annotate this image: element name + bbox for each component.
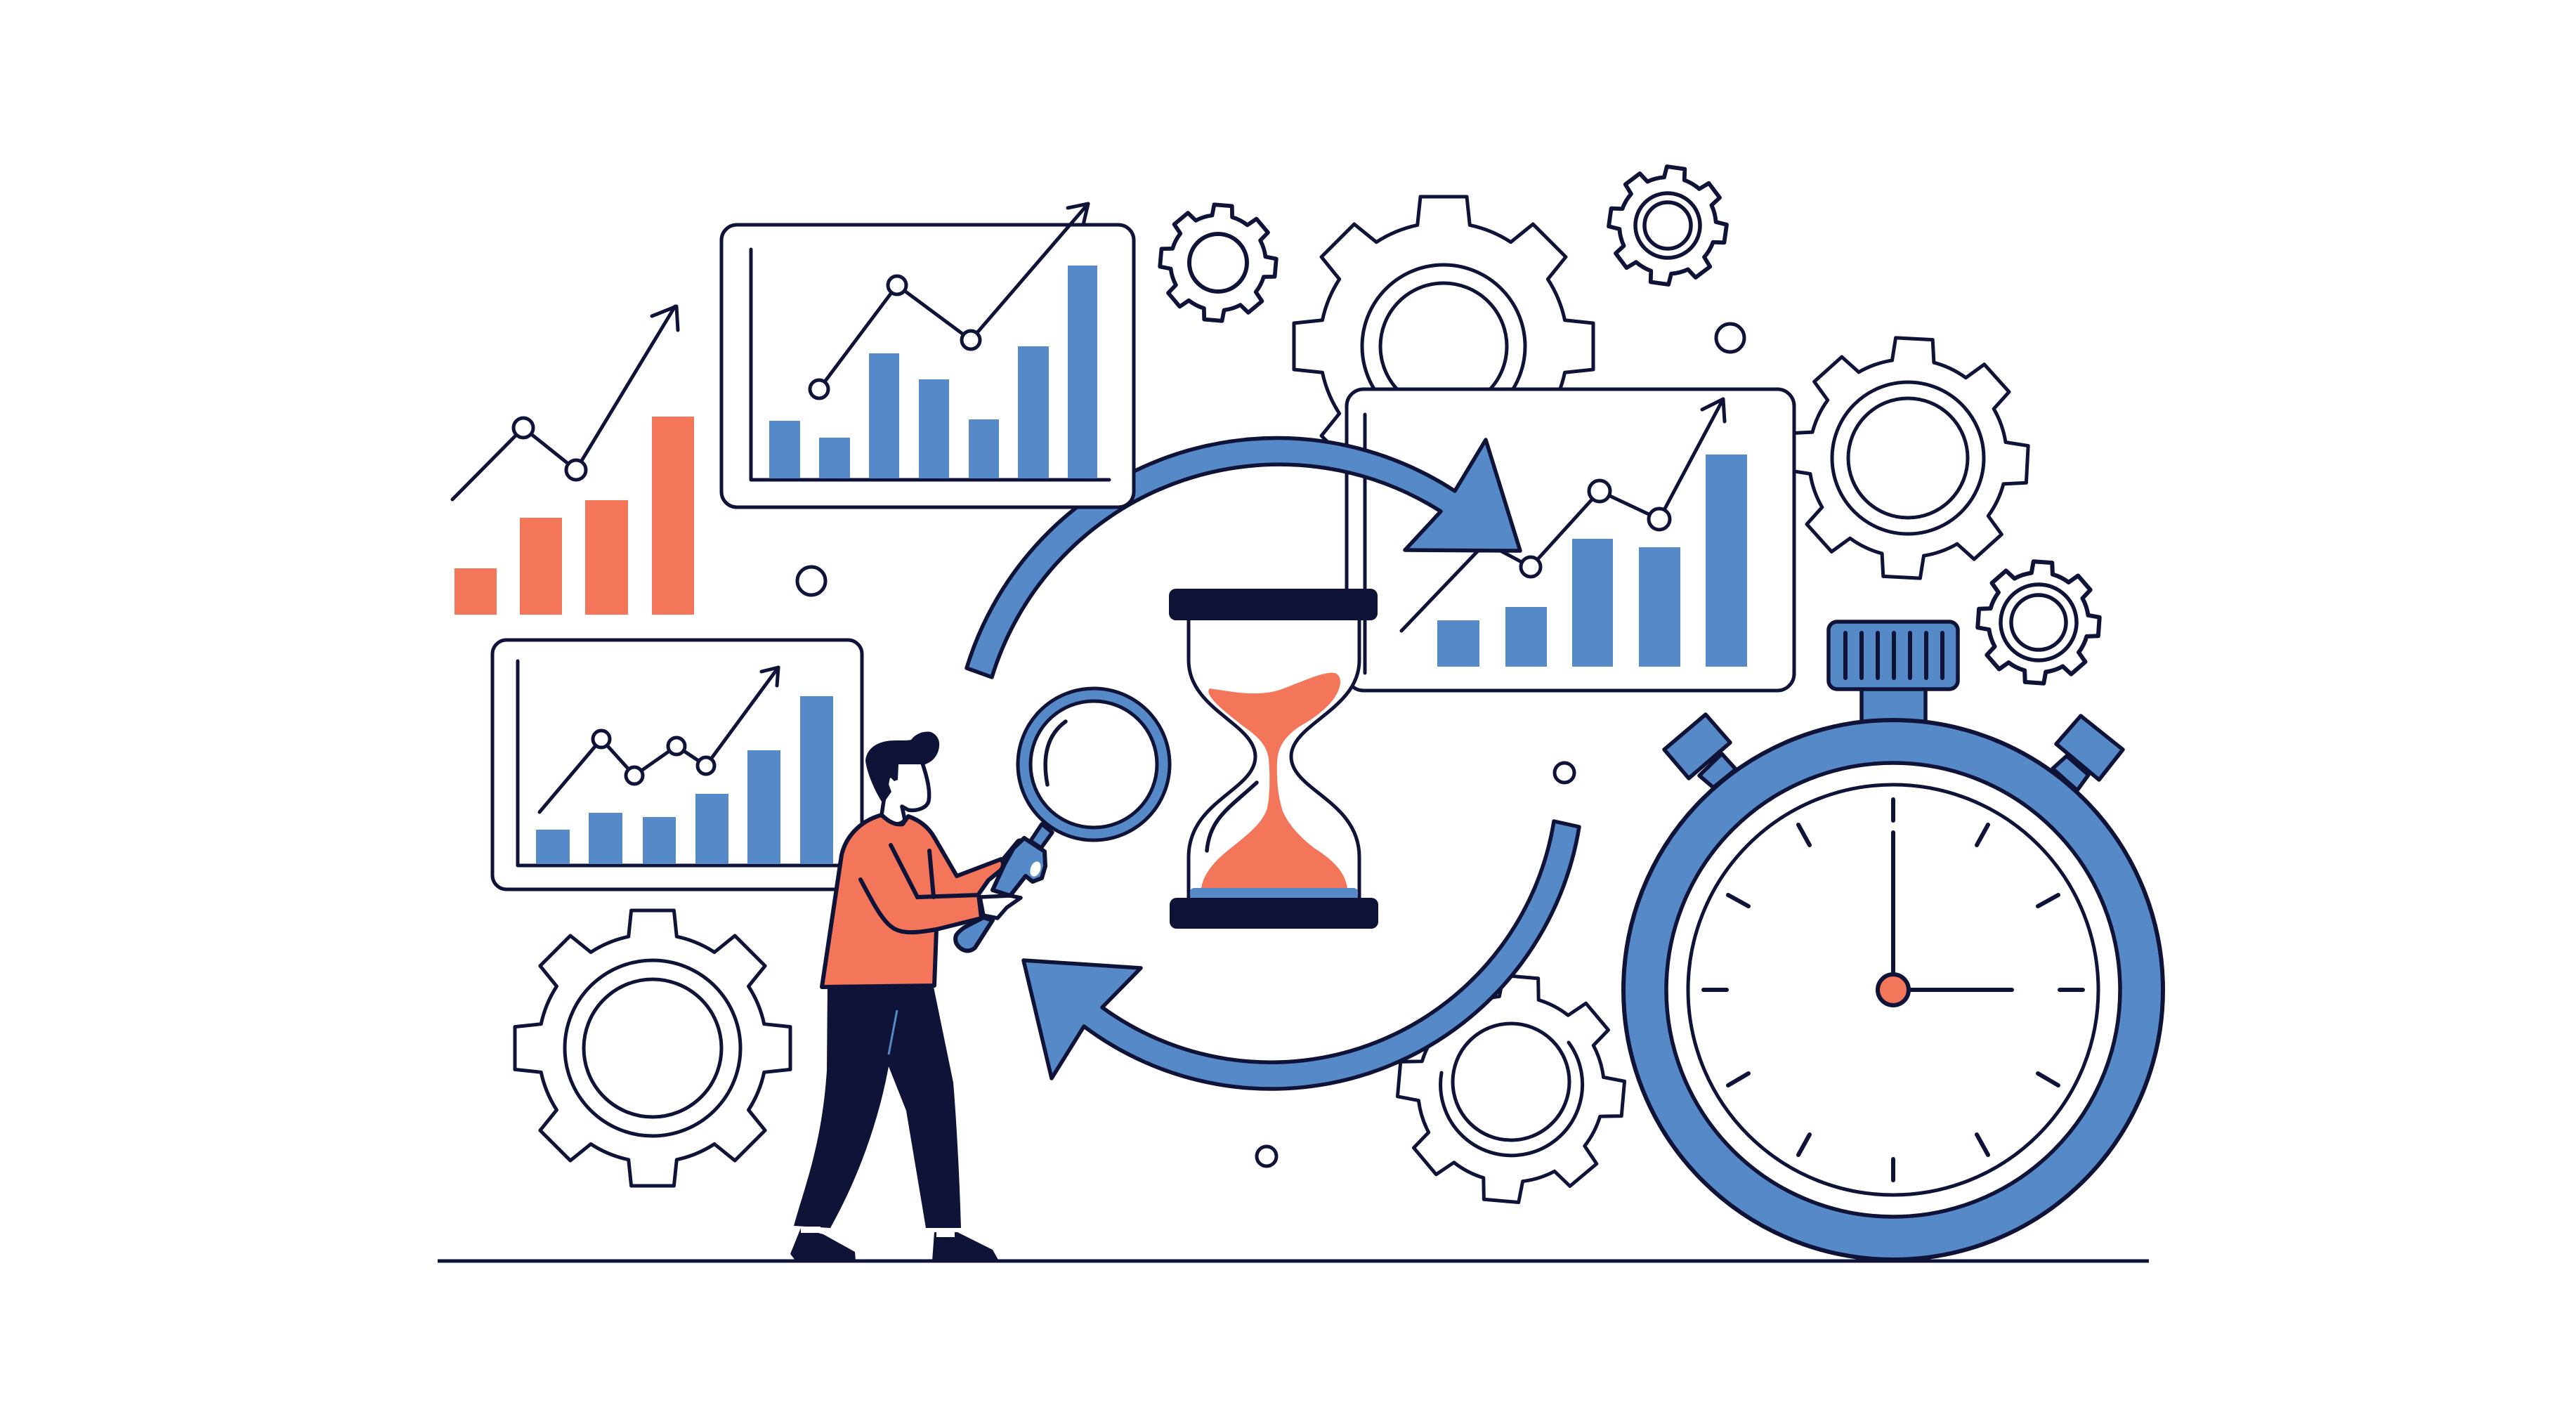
person: hand	[980, 896, 1021, 918]
person: trouser seam	[889, 1010, 897, 1054]
magnifying glass: handle end	[955, 917, 993, 950]
chart: orange bars with rising trend line	[452, 306, 694, 615]
person: neck and face	[882, 755, 929, 824]
gear: small top right	[1602, 159, 1734, 292]
arrow: top circular arrow	[967, 438, 1520, 677]
person: sweater fold lines	[861, 845, 979, 932]
stopwatch	[1623, 622, 2163, 1260]
gear: small right	[1974, 558, 2103, 687]
decorative circle: top right	[1716, 324, 1744, 352]
person: hair	[865, 731, 939, 802]
decorative circle: bottom	[1257, 1146, 1276, 1166]
magnifying glass: grip	[993, 838, 1045, 896]
stopwatch: tick marks	[1704, 799, 2083, 1180]
stopwatch: crown	[1829, 622, 1958, 724]
stopwatch: right button	[2053, 716, 2123, 790]
person: left shoe	[790, 1228, 856, 1261]
ground line	[438, 1259, 2149, 1263]
magnifying glass: neck	[1031, 824, 1052, 848]
stopwatch: left button	[1664, 714, 1736, 788]
gear: bottom right behind arrow	[1390, 967, 1633, 1210]
stopwatch: case	[1623, 720, 2163, 1260]
panel: top chart	[721, 204, 1134, 507]
person: right shoe	[932, 1232, 999, 1261]
panel: right chart	[1347, 389, 1794, 691]
gear: bottom left large	[515, 910, 790, 1186]
stopwatch: inner ring	[1666, 763, 2120, 1217]
hourglass: bottom cap	[1170, 898, 1378, 929]
arrow: bottom circular arrow	[1024, 821, 1579, 1089]
gear: right large	[1782, 332, 2034, 584]
panel: left chart	[492, 640, 862, 889]
decorative circle: left	[797, 567, 825, 595]
hourglass: highlight	[1207, 783, 1257, 851]
person: trousers	[794, 984, 961, 1228]
decorative circle: centre right	[1555, 763, 1574, 783]
hourglass: blue base	[1190, 888, 1358, 899]
hourglass: top cap	[1169, 589, 1378, 620]
person: sweater	[822, 815, 1003, 987]
hourglass	[1169, 589, 1378, 929]
hourglass: glass	[1189, 618, 1359, 901]
gear: small top left	[1156, 200, 1281, 325]
stopwatch: face	[1688, 785, 2098, 1195]
person with magnifying glass	[790, 695, 1163, 1261]
stopwatch: hands	[1878, 832, 2012, 1005]
hourglass: sand	[1201, 673, 1347, 888]
person: ankle bands	[801, 1227, 955, 1237]
gear: top centre large	[1294, 197, 1593, 496]
magnifying glass: ring	[1024, 695, 1163, 834]
